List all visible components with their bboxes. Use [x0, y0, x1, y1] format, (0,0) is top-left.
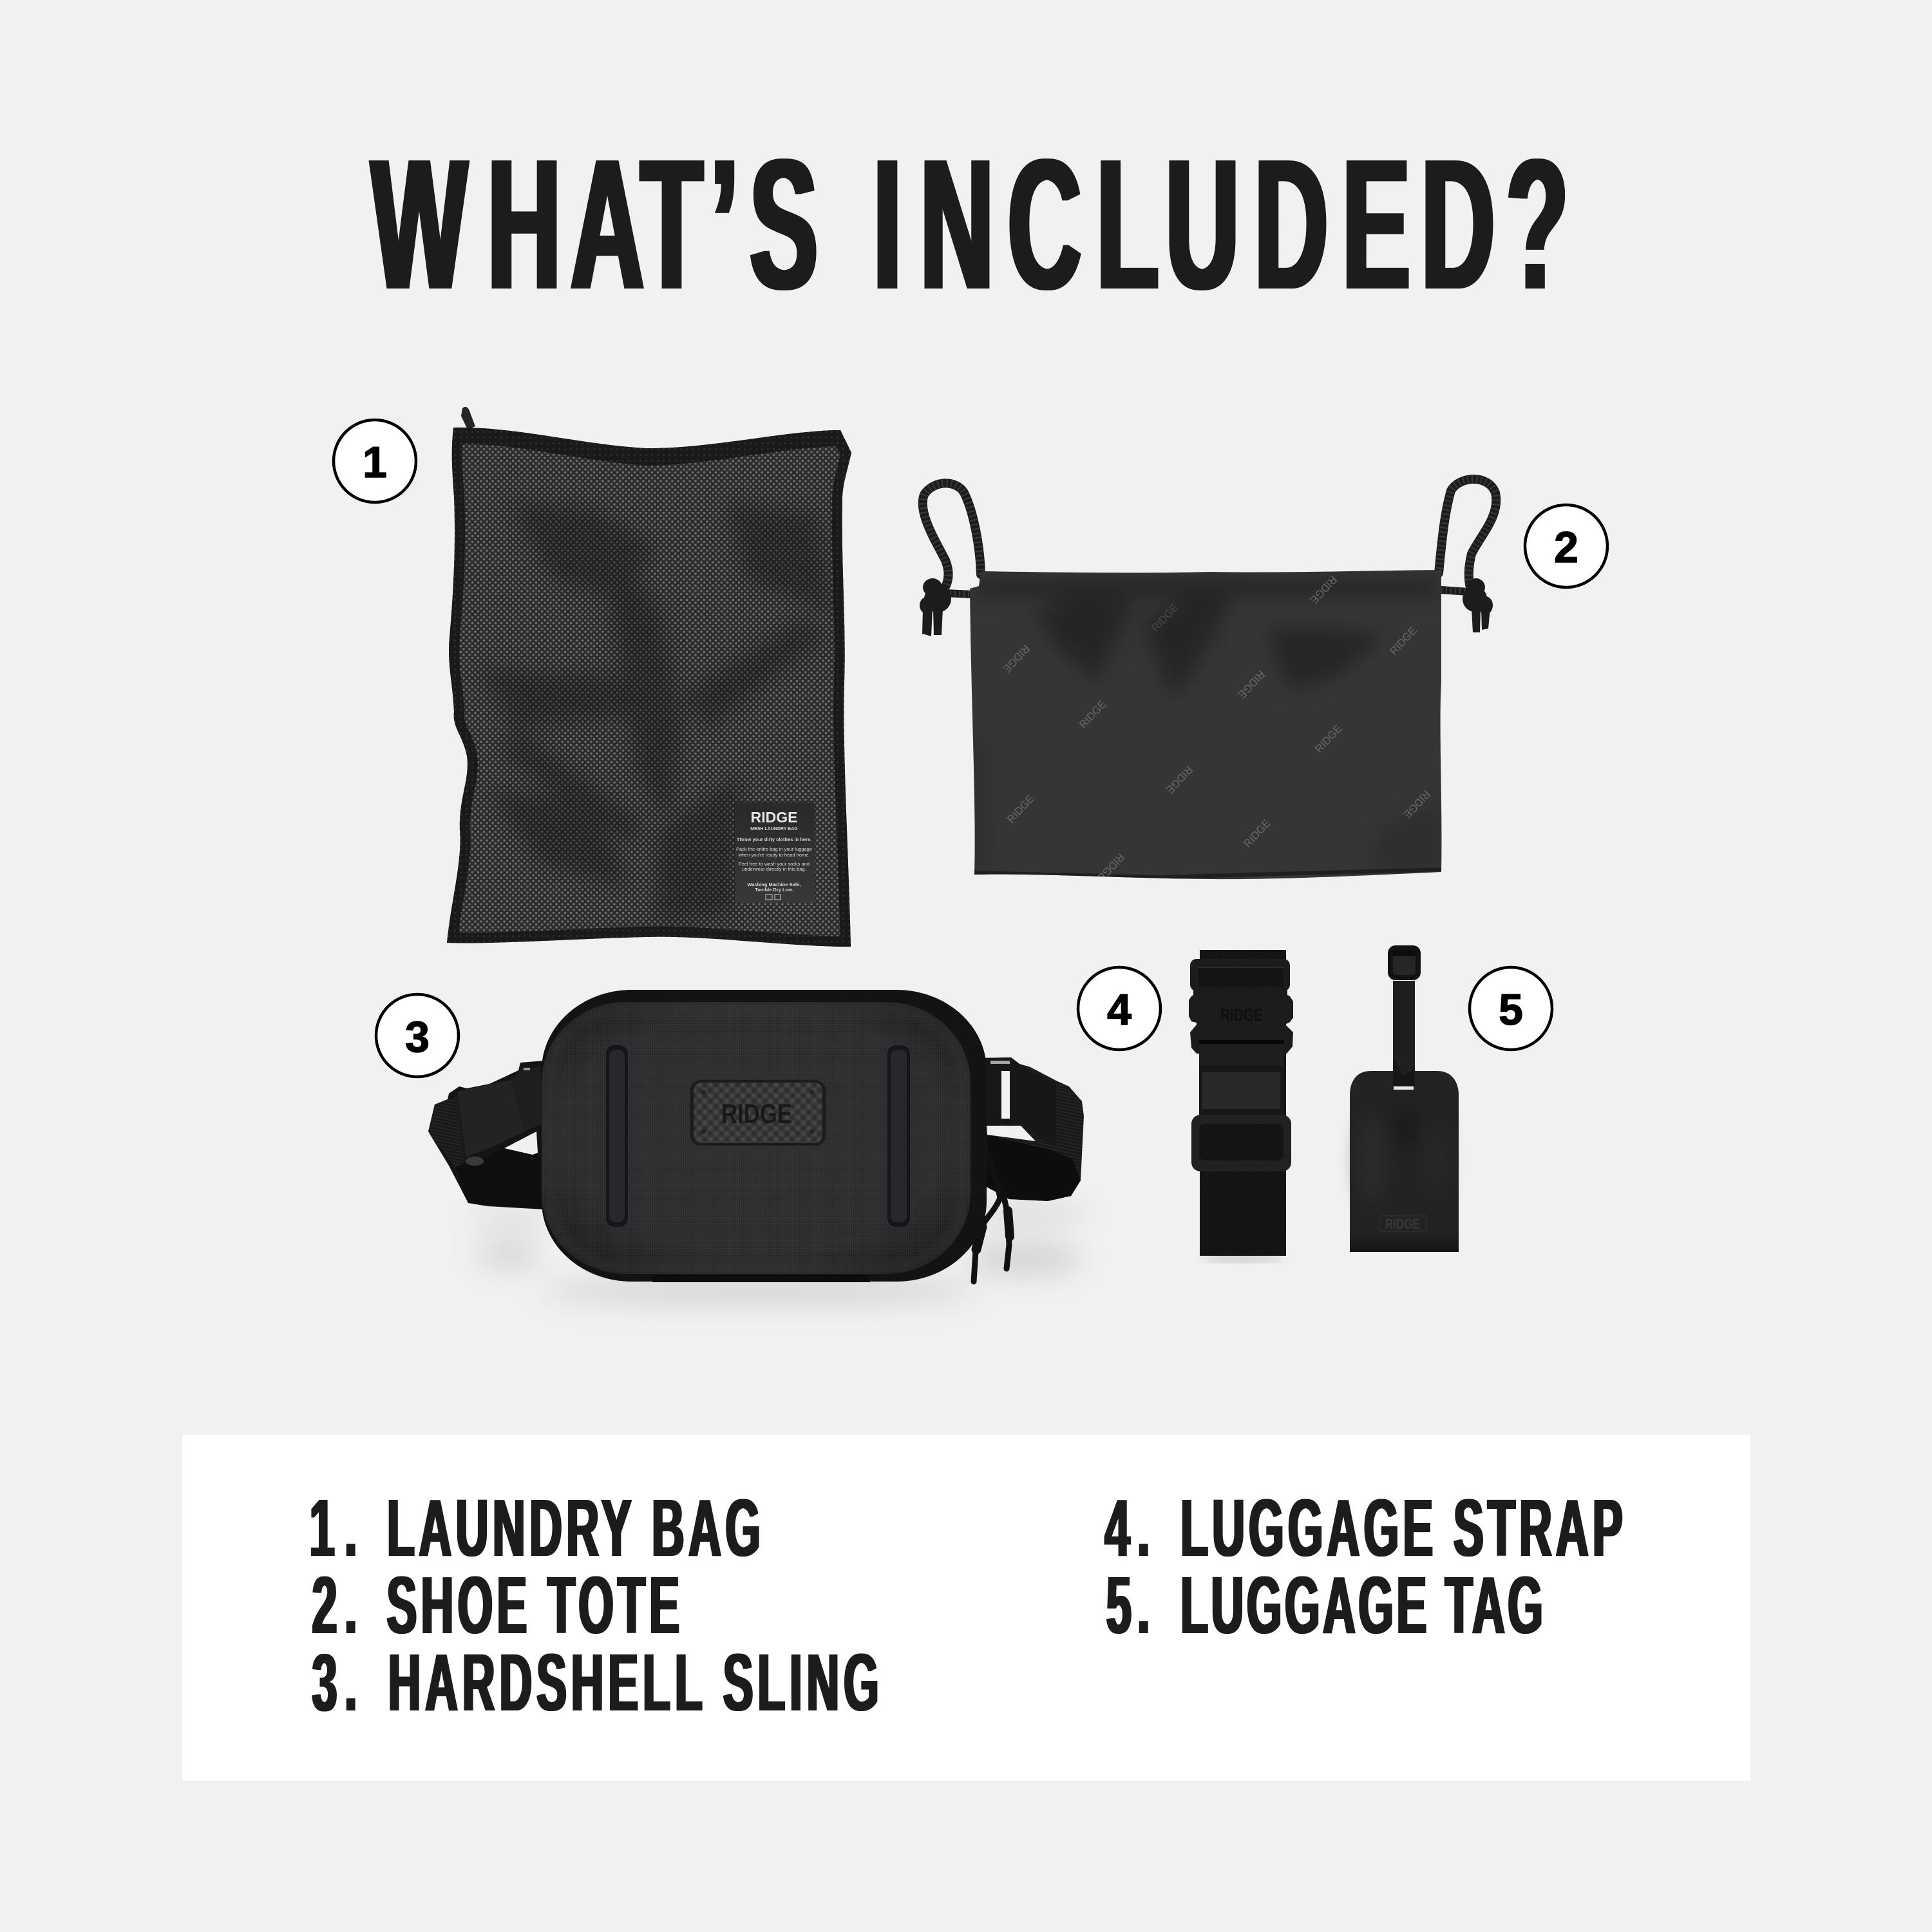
number badge 4: 4 [1107, 985, 1132, 1034]
drawstring cords [923, 479, 1496, 594]
number badge 5: 5 [1499, 985, 1523, 1034]
bag label: Throw your dirty clothes in here. [737, 837, 811, 842]
lower slide adjuster [1191, 1115, 1291, 1171]
tote watermark logos: RIDGE [1307, 573, 1340, 606]
sling shadow [470, 1206, 1088, 1303]
list items: 4. [1105, 1482, 1150, 1573]
carbon logo plate [690, 1080, 826, 1146]
tote watermark logos: RIDGE [1235, 668, 1267, 701]
tote watermark logos: RIDGE [1387, 625, 1419, 658]
bag label: Feel free to wash your socks and [739, 861, 810, 867]
tote watermark logos: RIDGE [1241, 817, 1273, 850]
list items: 5. [1106, 1559, 1150, 1651]
buckle with embossed logo [1189, 990, 1293, 1054]
title: WHAT’S INCLUDED? [371, 120, 1568, 328]
item 1: mesh laundry bag [438, 407, 863, 953]
tag buckle [1388, 945, 1421, 980]
bag label: MESH LAUNDRY BAG [750, 827, 798, 831]
strap lower section [1393, 1056, 1415, 1086]
list items: SHOE TOTE [387, 1559, 679, 1651]
bag binding [447, 428, 851, 947]
panel: items list [182, 1435, 1750, 1781]
bag label: Pack the entire bag in your luggage [736, 846, 812, 852]
mesh body [438, 419, 863, 953]
tote watermark logos [1000, 573, 1433, 884]
hard shell front [542, 1002, 971, 1274]
number badge 2: 2 [1554, 523, 1578, 572]
right cord knot [1463, 578, 1493, 632]
base foot [652, 1275, 870, 1282]
bag label: RIDGE [751, 809, 797, 826]
number badge 1 [334, 420, 416, 502]
left strap [428, 1061, 544, 1209]
stitched patch [1199, 1066, 1285, 1115]
number badge 4 [1078, 967, 1160, 1050]
list items: 2. [312, 1559, 357, 1651]
list items: LAUNDRY BAG [387, 1482, 761, 1573]
webbing [1200, 950, 1286, 1256]
item 4: luggage strap [1189, 950, 1293, 1262]
buckle with embossed logo: RIDGE [1220, 1005, 1263, 1025]
tote body [966, 567, 1446, 884]
tote watermark logos: RIDGE [1095, 851, 1127, 884]
item 2: shoe tote [920, 479, 1496, 884]
right strap [978, 1057, 1084, 1201]
tote watermark logos: RIDGE [1005, 793, 1037, 826]
bag label: when you're ready to head home. [737, 852, 810, 858]
list items: 1. [310, 1482, 357, 1573]
bag label: underwear directly in this bag. [742, 866, 806, 872]
list items: LUGGAGE TAG [1180, 1559, 1543, 1651]
list items: 3. [312, 1636, 357, 1728]
number badge 5 [1470, 967, 1552, 1050]
top slider [1190, 959, 1290, 991]
glossy strap band [1199, 1040, 1284, 1066]
number badge 1: 1 [363, 438, 387, 487]
number badge 3: 3 [405, 1012, 430, 1061]
carbon logo plate: RIDGE [721, 1099, 792, 1130]
item 3: hardshell sling [428, 990, 1088, 1303]
strap shadow [1202, 1255, 1284, 1262]
tag strap [1393, 981, 1415, 1077]
list items: LUGGAGE STRAP [1180, 1482, 1623, 1573]
tote watermark logos: RIDGE [1401, 788, 1433, 820]
tote watermark logos: RIDGE [1000, 642, 1032, 675]
tag body: RIDGE [1385, 1216, 1420, 1232]
list items: HARDSHELL SLING [388, 1636, 879, 1728]
tote watermark logos: RIDGE [1077, 698, 1109, 731]
tote watermark logos: RIDGE [1163, 763, 1195, 796]
number badge 2 [1525, 505, 1607, 587]
cord rib texture [923, 479, 1496, 594]
zipper pulls [974, 1154, 1010, 1282]
bag label [735, 802, 815, 903]
tote watermark logos: RIDGE [1312, 723, 1345, 755]
bag label: Tumble Dry Low. [755, 887, 793, 893]
zipper pull [461, 407, 475, 430]
number badge 3 [376, 994, 459, 1077]
sling outer case [542, 990, 987, 1282]
tag body [1350, 1071, 1459, 1252]
shell grooves [606, 1045, 910, 1227]
left cord knot [920, 578, 951, 636]
bag label: Washing Machine Safe, [747, 882, 801, 887]
tote watermark logos: RIDGE [1149, 601, 1181, 634]
item 5: luggage tag [1350, 945, 1459, 1252]
list items [310, 1482, 1623, 1728]
